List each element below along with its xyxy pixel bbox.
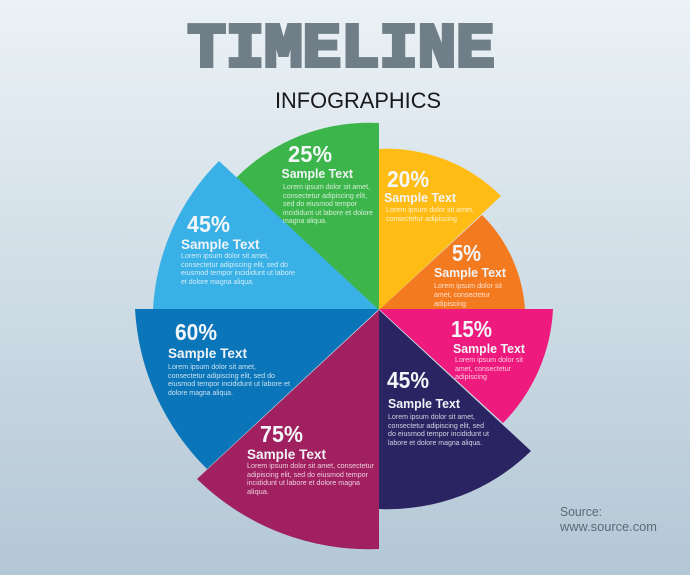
source note: www.source.com (559, 520, 657, 534)
text block: 45% light blue: et dolore magna aliqua. (181, 279, 254, 286)
text block: 25%: magna aliqua. (283, 218, 327, 225)
text block: 5%: adipiscing (434, 301, 466, 308)
panel: 75% maroon wedge (197, 310, 379, 549)
text block: 25%: Lorem ipsum dolor sit amet, (283, 184, 370, 191)
text block: 25%: sed do eiusmod tempor (283, 201, 358, 208)
text block: 20% (384, 166, 474, 223)
text block: 15%: Sample Text (453, 342, 526, 356)
text block: 5% (434, 240, 507, 308)
text block: 45% light blue: Lorem ipsum dolor sit amet, (181, 253, 269, 260)
text block: 60%: Sample Text (168, 345, 247, 361)
text block: 60%: eiusmod tempor incididunt ut labore et (168, 381, 290, 388)
text block: 45% navy: 45% (387, 367, 429, 393)
panel: 45% light blue wedge (153, 161, 379, 310)
panel: 20% yellow wedge (379, 149, 501, 310)
text block: 75%: aliqua. (247, 489, 269, 496)
text block: 45% light blue (181, 211, 295, 286)
text block: 20%: consectetur adipiscing (386, 216, 457, 223)
text block: 25% (282, 141, 373, 225)
text block: 15%: 15% (451, 316, 492, 342)
title: TIMELINE (188, 14, 494, 85)
text block: 5%: amet, consectetur (434, 292, 491, 299)
panel: 5% orange wedge (379, 215, 525, 310)
text block: 45% navy: Lorem ipsum dolor sit amet, (388, 414, 475, 421)
pie chart (135, 123, 553, 549)
text block: 75%: incididunt ut labore et dolore magna (247, 480, 360, 487)
text block: 15%: Lorem ipsum dolor sit (455, 357, 523, 364)
text block: 20%: Sample Text (384, 191, 457, 205)
text block: 60%: Lorem ipsum dolor sit amet, (168, 364, 256, 371)
panel: 45% navy wedge (379, 310, 531, 509)
text block: 75%: Sample Text (247, 446, 326, 462)
text block: 60% (168, 319, 290, 397)
panel: 15% pink wedge (379, 309, 553, 423)
text block: 5%: Sample Text (434, 266, 507, 280)
text block: 60%: dolore magna aliqua. (168, 390, 233, 397)
text block: 60%: 60% (175, 319, 217, 345)
text block: 25%: 25% (288, 141, 332, 167)
text block: 5%: Lorem ipsum dolor sit (434, 283, 502, 290)
text block: 45% light blue: 45% (187, 211, 230, 237)
text block: 45% navy: labore et dolore magna aliqua. (388, 440, 482, 447)
text block: 15%: adipiscing (455, 374, 487, 381)
text block: 75%: adipiscing elit, sed do eiusmod tempor (247, 472, 369, 479)
text block: 5%: 5% (452, 240, 481, 266)
text block: 75%: 75% (260, 421, 303, 447)
text block: 45% navy: consectetur adipiscing elit, sed (388, 423, 484, 430)
text block: 45% navy: Sample Text (388, 397, 461, 411)
panel: 25% green wedge (236, 123, 379, 310)
text block: 45% light blue: eiusmod tempor incididunt ut labore (181, 270, 295, 277)
text block: 75% (247, 421, 375, 496)
text block: 45% navy (387, 367, 489, 447)
text block: 25%: incididunt ut labore et dolore (283, 210, 373, 217)
source note: Source: (560, 505, 602, 519)
text block: 20%: 20% (387, 166, 429, 192)
text block: 25%: Sample Text (282, 167, 354, 181)
text block: 60%: consectetur adipiscing elit, sed do (168, 373, 275, 380)
text block: 25%: consectetur adipiscing elit, (283, 193, 367, 200)
subtitle: INFOGRAPHICS (275, 88, 441, 113)
text block: 15% (451, 316, 526, 381)
text block: 20%: Lorem ipsum dolor sit amet, (386, 207, 474, 214)
text block: 45% navy: do eiusmod tempor incididunt ut (388, 431, 489, 438)
text block: 45% light blue: Sample Text (181, 236, 260, 252)
text block: 15%: amet, consectetur (455, 366, 512, 373)
text block: 45% light blue: consectetur adipiscing elit, sed do (181, 262, 288, 269)
panel: 60% dark blue wedge (135, 309, 379, 469)
text block: 75%: Lorem ipsum dolor sit amet, consectetur (247, 463, 375, 470)
source note (559, 505, 657, 534)
